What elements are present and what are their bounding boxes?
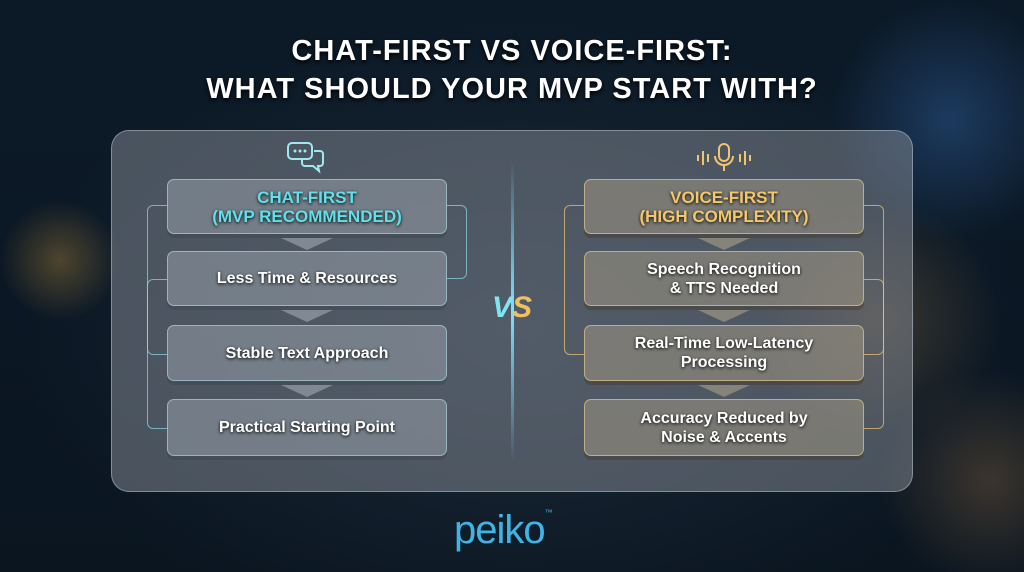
divider glow [511, 161, 514, 461]
panel: comparison [111, 130, 913, 492]
item: accuracy [584, 399, 864, 456]
header: voice-first: VOICE-FIRST [670, 188, 778, 206]
item: speech recognition [584, 251, 864, 306]
item: realtime: Real-Time Low-Latency [635, 335, 813, 352]
item: practical [167, 399, 447, 456]
header: chat-first: (MVP RECOMMENDED) [212, 206, 402, 226]
header: chat-first: CHAT-FIRST [257, 188, 357, 206]
item: speech recognition: & TTS Needed [670, 280, 778, 296]
icon: microphone waveform [697, 143, 751, 171]
header: voice-first: (HIGH COMPLEXITY) [639, 206, 809, 226]
left column: chat-first [167, 179, 447, 460]
icon: chat bubbles [287, 142, 324, 174]
header: chat-first [167, 179, 447, 234]
item: realtime: Processing [681, 354, 767, 371]
connector lines left [147, 205, 167, 355]
title: WHAT SHOULD YOUR MVP START WITH? [206, 73, 818, 105]
item: accuracy: Accuracy Reduced by [640, 410, 808, 426]
item: stable text: Stable Text Approach [226, 344, 388, 362]
logo: peiko: peiko™ [454, 508, 552, 552]
title: CHAT-FIRST VS VOICE-FIRST: [291, 35, 733, 67]
VS label: VS [492, 291, 532, 324]
item: speech recognition: Speech Recognition [647, 260, 801, 278]
item: stable text [167, 325, 447, 381]
header: voice-first [584, 179, 864, 234]
item: less time [167, 251, 447, 306]
item: accuracy: Noise & Accents [661, 428, 787, 446]
item: practical: Practical Starting Point [219, 419, 395, 436]
right column: voice-first [584, 179, 864, 460]
item: less time: Less Time & Resources [217, 270, 397, 287]
item: realtime [584, 325, 864, 381]
title [206, 35, 818, 105]
